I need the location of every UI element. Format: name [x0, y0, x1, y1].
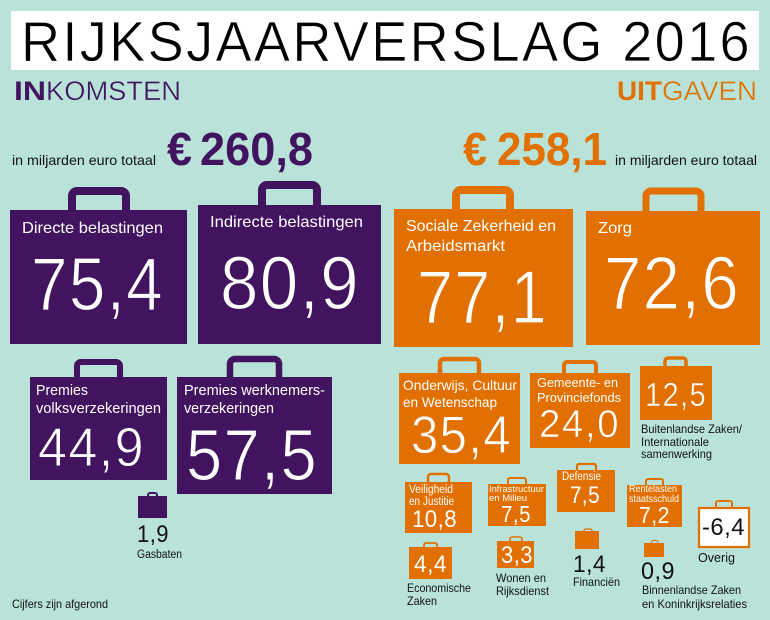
case: wonen en rijksdienst: Wonen en: [496, 571, 546, 585]
case: premies werknemersverzekeringen: 57,5: [186, 416, 318, 496]
note: afgerond: Cijfers zijn afgerond: [12, 597, 108, 611]
case: indirecte belastingen: 80,9: [220, 241, 360, 325]
case: directe belastingen: 75,4: [31, 242, 164, 326]
case: premies werknemersverzekeringen: [177, 359, 332, 496]
case: onderwijs: [399, 359, 520, 465]
case: infrastructuur en milieu: [488, 478, 546, 527]
case: sociale zekerheid: [394, 190, 573, 347]
case: buitenlandse zaken: Buitenlandse Zaken/: [641, 422, 743, 436]
case: financien: 1,4: [573, 551, 606, 578]
case: financien: Financiën: [573, 575, 620, 589]
case: gasbaten: [137, 493, 182, 561]
case: sociale zekerheid: Sociale Zekerheid en: [406, 218, 556, 235]
case: binnenlandse zaken: 0,9: [641, 558, 675, 585]
case: wonen en rijksdienst: Rijksdienst: [496, 584, 550, 598]
total expenditure: €: [463, 123, 487, 175]
case: economische zaken: Economische: [407, 581, 471, 595]
case: indirecte belastingen: [198, 185, 381, 344]
case: financien: [573, 529, 620, 589]
case: overig: Overig: [698, 550, 735, 565]
case: defensie: Defensie: [562, 471, 601, 483]
case: economische zaken: Zaken: [407, 594, 437, 608]
case: buitenlandse zaken: samenwerking: [641, 447, 712, 461]
case: defensie: [557, 464, 615, 512]
case: rentelasten staatsschuld: Rentelasten: [629, 483, 677, 495]
case: onderwijs: en Wetenschap: [403, 394, 497, 410]
case: zorg: Zorg: [598, 220, 632, 237]
case: rentelasten staatsschuld: staatsschuld: [629, 493, 679, 505]
case: premies werknemersverzekeringen: verzekeringen: [184, 401, 274, 417]
case: directe belastingen: Directe belastingen: [22, 220, 163, 237]
total expenditure: 258,1: [497, 123, 607, 175]
case: buitenlandse zaken: 12,5: [645, 376, 707, 413]
case: premies volksverzekeringen: 44,9: [38, 416, 145, 478]
case: gasbaten: Gasbaten: [137, 549, 182, 561]
case: economische zaken: 4,4: [414, 551, 447, 578]
heading: inkomsten: KOMSTEN: [46, 76, 181, 106]
total income: 260,8: [200, 123, 313, 175]
case: wonen en rijksdienst: [496, 537, 550, 598]
case: zorg: 72,6: [604, 241, 740, 325]
case: gasbaten: 1,9: [137, 521, 169, 548]
text: in miljarden right: in miljarden euro totaal: [615, 152, 757, 168]
case: binnenlandse zaken: en Koninkrijksrelaties: [642, 597, 747, 611]
case: rentelasten staatsschuld: 7,2: [639, 502, 670, 528]
case: overig: -6,4: [702, 514, 745, 541]
case: wonen en rijksdienst: 3,3: [501, 542, 533, 569]
case: rentelasten staatsschuld: [627, 479, 682, 528]
case: zorg: [586, 191, 760, 345]
case: sociale zekerheid: Arbeidsmarkt: [406, 238, 506, 255]
case: onderwijs: Onderwijs, Cultuur: [403, 377, 517, 393]
heading: uitgaven: GAVEN: [662, 76, 757, 106]
case: buitenlandse zaken: [640, 358, 743, 461]
case: gemeente- en provinciefonds: [530, 362, 630, 448]
title: RIJKSJAARVERSLAG 2016: [21, 10, 752, 74]
case: infrastructuur en milieu: 7,5: [501, 501, 531, 527]
heading: uitgaven: [617, 76, 757, 106]
case: premies werknemersverzekeringen: Premies werknemers-: [184, 383, 325, 399]
case: veiligheid en justitie: 10,8: [412, 506, 457, 533]
case: gemeente- en provinciefonds: Gemeente- en: [537, 375, 618, 390]
case: binnenlandse zaken: [641, 540, 747, 611]
case: directe belastingen: [10, 191, 187, 344]
case: sociale zekerheid: 77,1: [417, 255, 548, 339]
heading: uitgaven: UIT: [617, 76, 663, 106]
case: buitenlandse zaken: Internationale: [641, 435, 709, 449]
case: veiligheid en justitie: [405, 474, 472, 533]
case: veiligheid en justitie: en Justitie: [409, 496, 454, 508]
case: premies volksverzekeringen: [30, 362, 167, 480]
case: gemeente- en provinciefonds: 24,0: [539, 403, 620, 446]
heading: inkomsten: IN: [14, 76, 46, 106]
case: premies volksverzekeringen: Premies: [36, 383, 88, 399]
case: infrastructuur en milieu: en Milieu: [489, 493, 527, 504]
case: defensie: 7,5: [570, 482, 600, 509]
case: binnenlandse zaken: Binnenlandse Zaken: [642, 583, 741, 597]
case: economische zaken: [407, 543, 471, 608]
case: gemeente- en provinciefonds: Provinciefonds: [537, 390, 621, 405]
case: indirecte belastingen: Indirecte belastingen: [210, 214, 363, 231]
case: veiligheid en justitie: Veiligheid: [409, 484, 453, 496]
case: overig: [698, 501, 749, 565]
case: premies volksverzekeringen: volksverzekeringen: [36, 401, 161, 417]
case: onderwijs: 35,4: [411, 406, 512, 465]
total income: €: [167, 123, 192, 175]
text: in miljarden left: in miljarden euro totaal: [12, 152, 156, 168]
case: infrastructuur en milieu: Infrastructuur: [489, 484, 544, 495]
